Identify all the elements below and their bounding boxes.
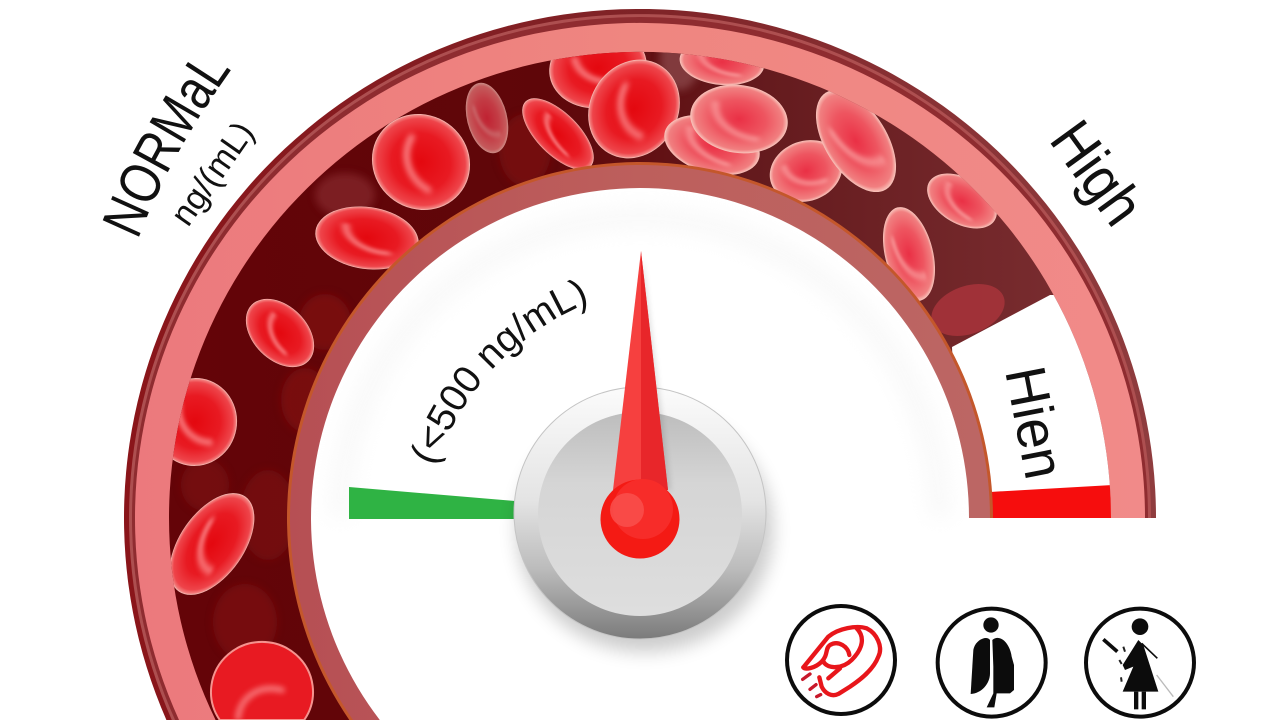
label: high inner: Hien: [993, 361, 1078, 484]
red high bar: [990, 485, 1112, 518]
green normal bar: [349, 487, 515, 519]
needle: [600, 251, 680, 558]
label: normal: NORMaL: [102, 62, 231, 237]
label: unit: ng/(mL): [163, 115, 262, 233]
blood cells: [146, 20, 1120, 720]
icon: woman figure: [1086, 609, 1194, 717]
label: threshold: (<500 ng/mL): [412, 280, 586, 462]
gauge arc: [124, 9, 1156, 720]
gauge hub: [514, 387, 773, 652]
cell at bottom edge: [211, 642, 313, 720]
label: high outer: High: [1037, 108, 1157, 238]
high zone white segment: [952, 295, 1120, 518]
outer vessel wall: [124, 9, 1156, 720]
background blurred cells: [181, 30, 700, 660]
icon: person with cloak: [938, 609, 1046, 717]
needle pivot: [600, 480, 680, 558]
vessel lumen: [169, 52, 1111, 720]
inner vessel wall: [287, 162, 993, 720]
icon: red organ: [787, 606, 895, 714]
